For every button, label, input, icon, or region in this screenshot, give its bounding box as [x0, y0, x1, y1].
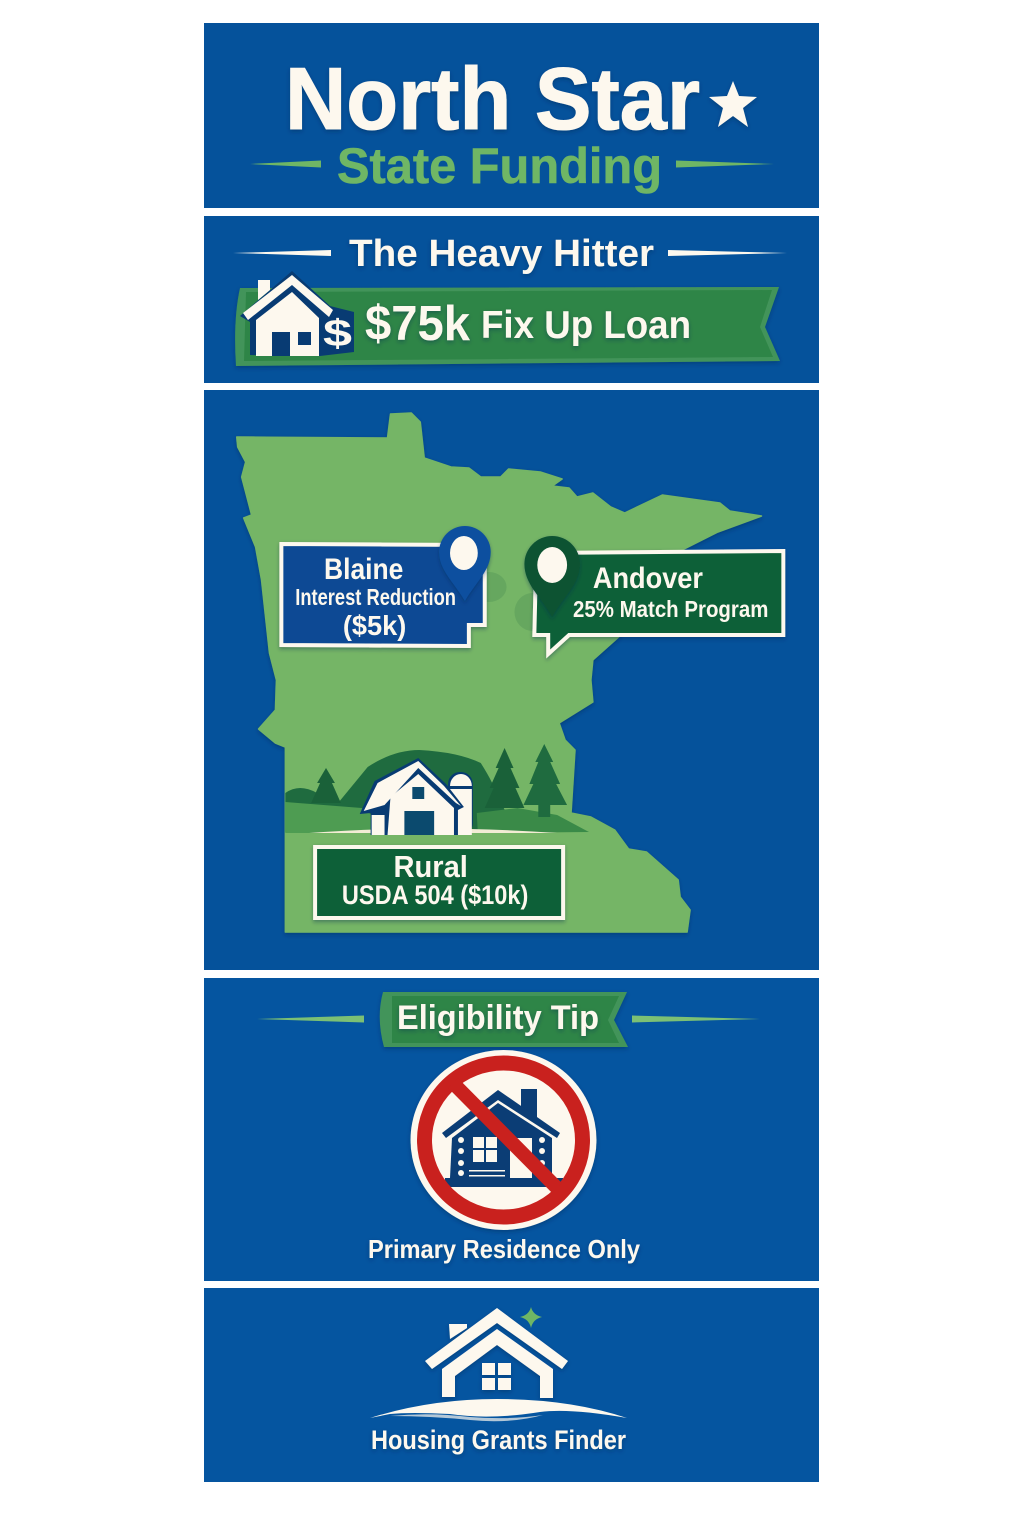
- panel: state map: [204, 390, 819, 970]
- subtitle rules: [250, 160, 774, 168]
- icon: house with dollar sign: [240, 271, 354, 356]
- panel: title header: [204, 23, 819, 208]
- brand name: Housing Grants Finder: Housing Grants Finder: [371, 1425, 626, 1455]
- heading: The Heavy Hitter: The Heavy Hitter: [349, 233, 654, 275]
- icon: house with dollar sign: $: [323, 313, 352, 355]
- log cabin: [442, 1089, 563, 1187]
- map of Minnesota with callouts: [237, 413, 783, 932]
- ribbon banner: [235, 287, 780, 366]
- callout: Rural: [315, 847, 563, 918]
- swoosh: [370, 1399, 627, 1421]
- pin: Blaine: [439, 526, 491, 601]
- heading rules: [233, 250, 787, 256]
- callout: Andover: [534, 551, 783, 654]
- loan amount: $75k: [365, 297, 471, 351]
- callout: Andover: Andover: [593, 562, 703, 595]
- loan label: Fix Up Loan: [481, 304, 691, 347]
- pin: Andover: [524, 536, 580, 617]
- panel: the heavy hitter: [204, 216, 819, 383]
- callout: Blaine: Interest Reduction: [295, 584, 456, 610]
- state shape: [237, 413, 762, 932]
- icon: barn and silo: [360, 758, 473, 835]
- ground strip: [309, 828, 557, 833]
- ribbon banner: [380, 992, 628, 1047]
- callout: Rural: Rural: [393, 849, 468, 884]
- rural scene: forest and hills: [285, 744, 589, 833]
- icon: star: [709, 81, 757, 127]
- callout: Blaine: [281, 544, 485, 646]
- callout: Andover: 25% Match Program: [573, 596, 768, 622]
- caption: Primary Residence Only: Primary Residence Only: [368, 1234, 640, 1264]
- panel: footer logo: [204, 1288, 819, 1482]
- subtitle: State Funding: State Funding: [337, 138, 662, 194]
- callout: Blaine: Blaine: [324, 553, 403, 586]
- callout: Blaine: ($5k): [343, 610, 406, 641]
- lake shadows: [471, 572, 550, 631]
- callout: Rural: USDA 504 ($10k): [342, 880, 528, 910]
- icon: green sparkle: [520, 1307, 542, 1328]
- icon: no log cabin sign: [410, 1050, 596, 1230]
- heading: Eligibility Tip: Eligibility Tip: [397, 999, 599, 1037]
- icon: house logo: [425, 1308, 568, 1398]
- heading rules: [257, 1016, 760, 1022]
- panel: eligibility tip: [204, 978, 819, 1281]
- title: North Star: North Star: [285, 49, 700, 148]
- prohibition ring and slash: [424, 1063, 582, 1217]
